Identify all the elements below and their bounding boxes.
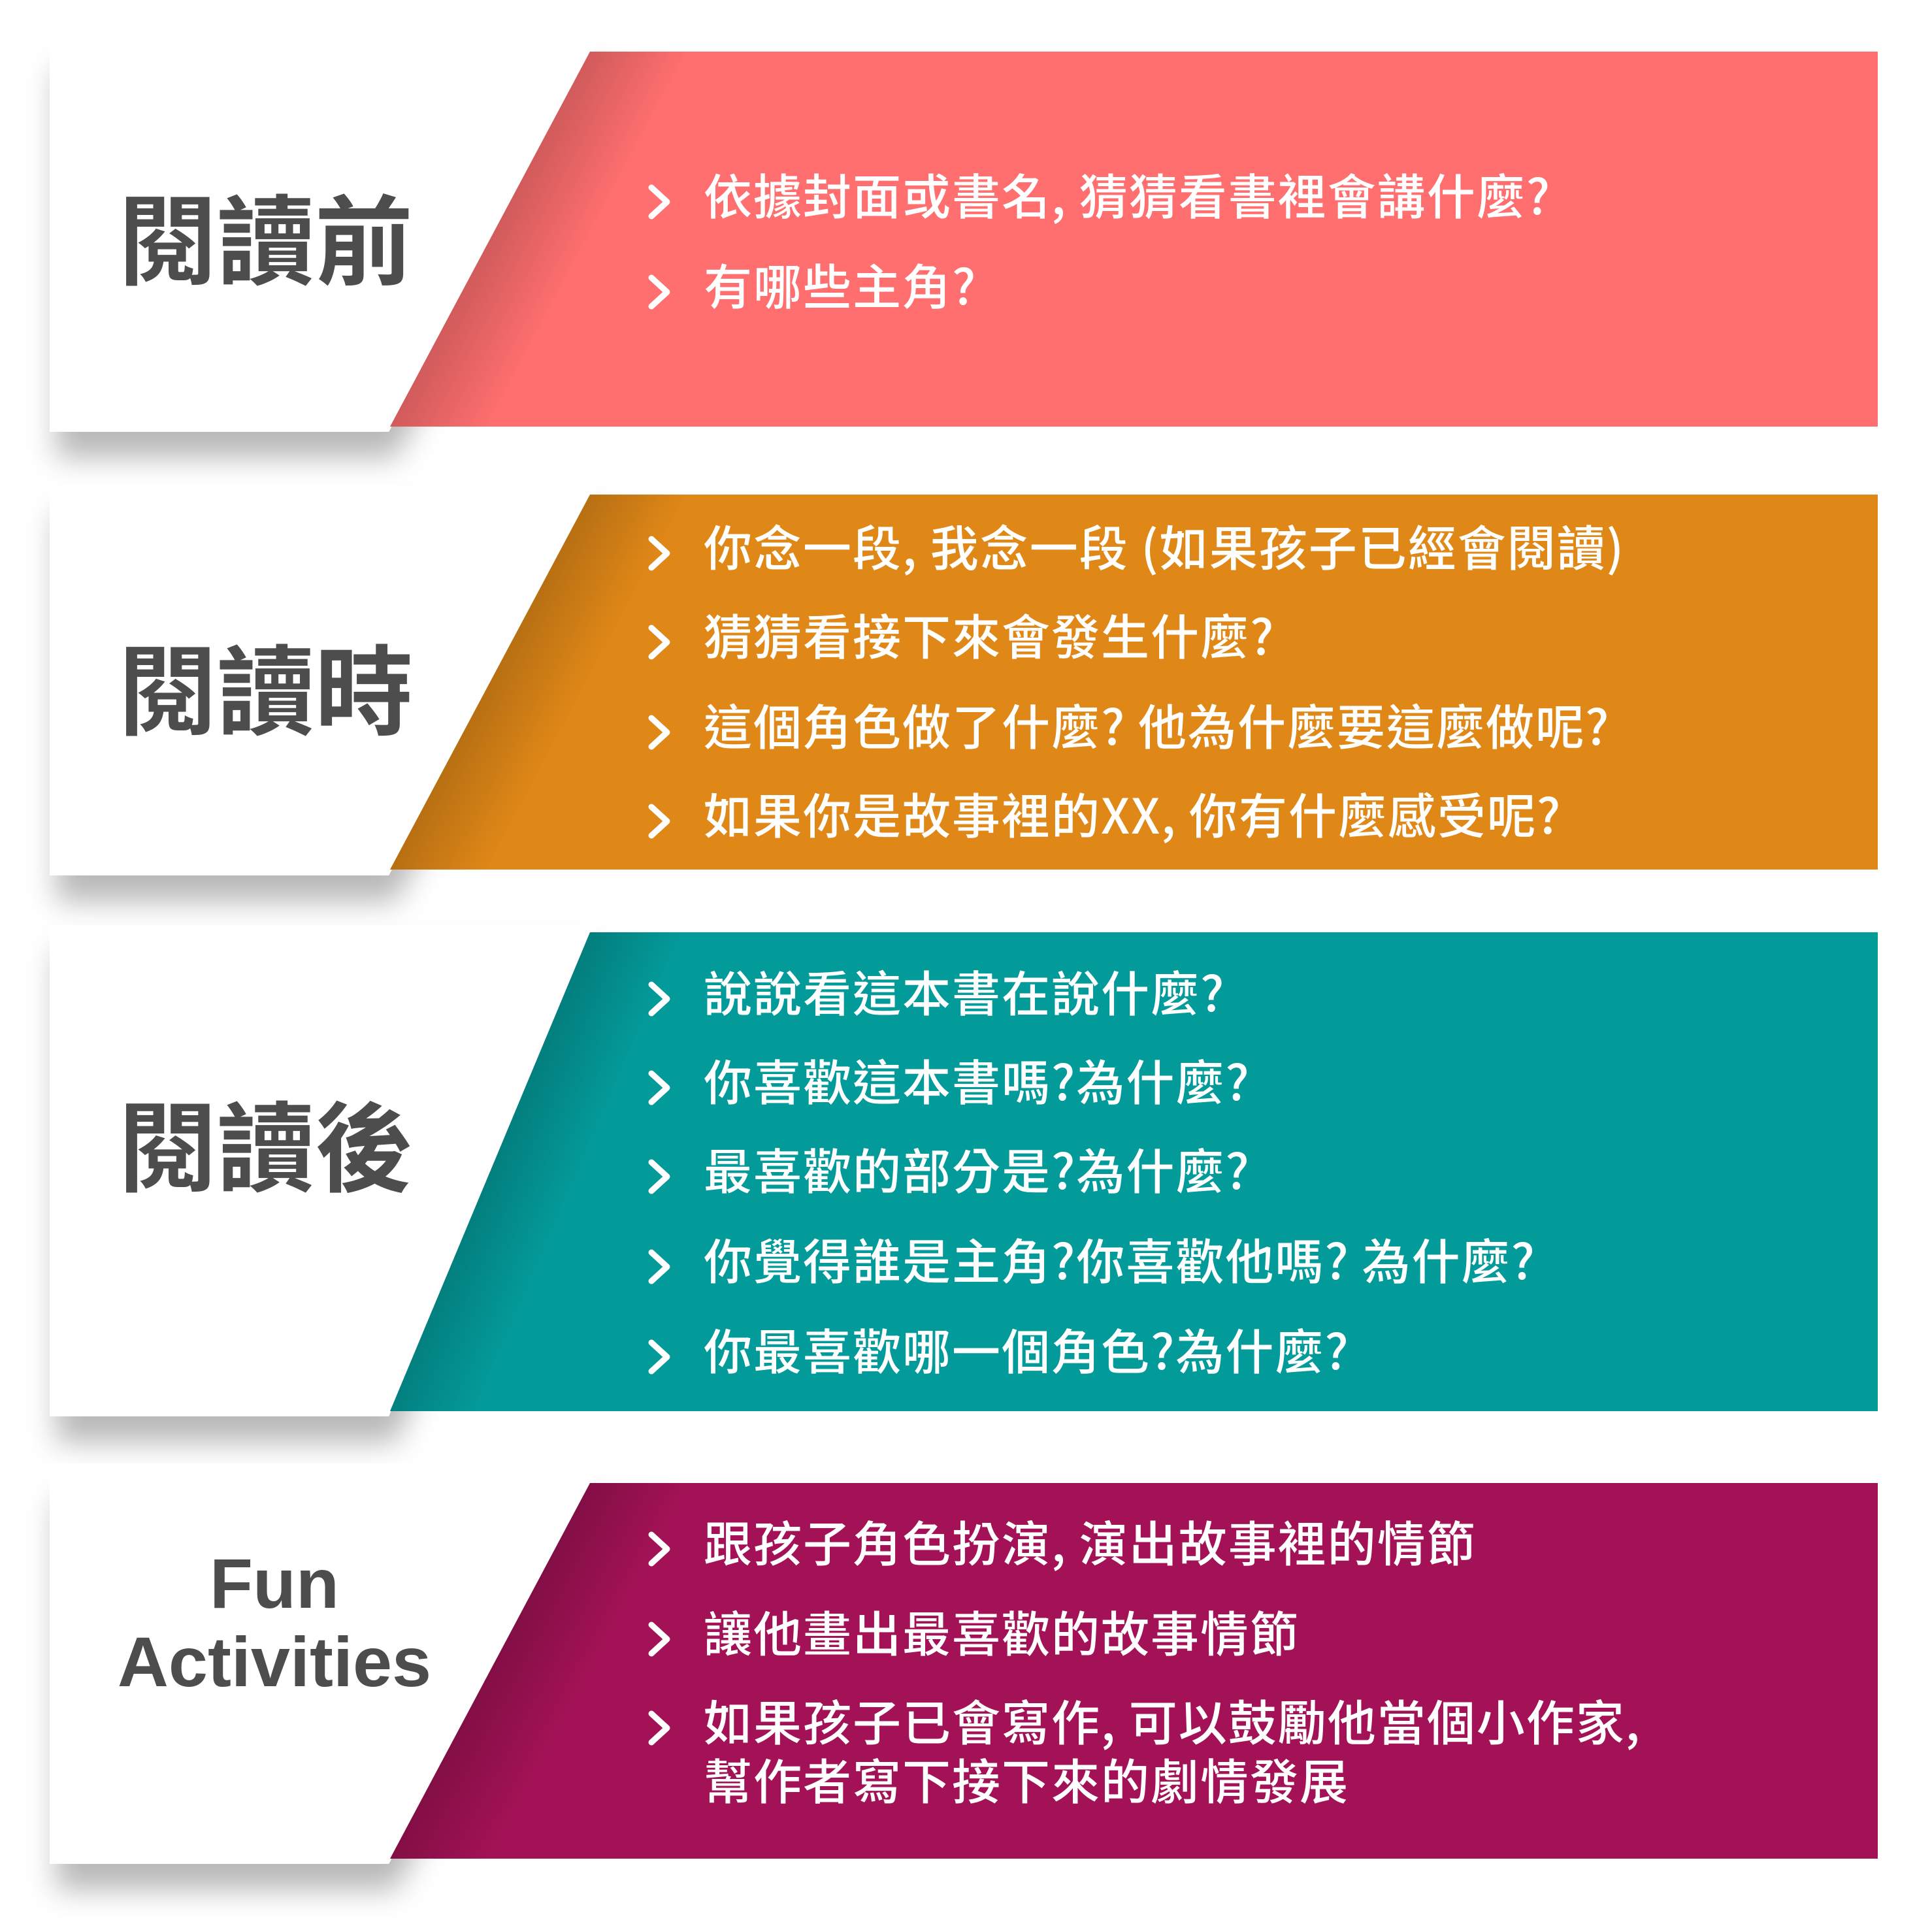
- panel: before reading: [40, 52, 1878, 474]
- bullet list: before reading: 有哪些主角?: [704, 249, 977, 319]
- bullet 1: [648, 510, 1625, 580]
- bullet list: fun activities: 如果孩子已會寫作, 可以鼓勵他當個小作家,: [704, 1685, 1641, 1755]
- bullet list: fun activities: [648, 1506, 1641, 1814]
- panel: during reading: [40, 495, 1878, 918]
- panel: after reading: [40, 932, 1878, 1459]
- heading: Fun Activities: Fun: [210, 1544, 339, 1623]
- bullet list: after reading: 最喜歡的部分是?為什麼?: [704, 1133, 1251, 1203]
- bullet 3: [648, 1685, 1641, 1814]
- bullet list: fun activities: 讓他畫出最喜歡的故事情節: [704, 1596, 1300, 1666]
- bullet list: fun activities: 幫作者寫下接下來的劇情發展: [704, 1744, 1349, 1814]
- bullet list: fun activities: 跟孩子角色扮演, 演出故事裡的情節: [704, 1506, 1477, 1576]
- bullet list: after reading: [648, 956, 1536, 1384]
- bullet 2: [648, 599, 1275, 669]
- bullet list: during reading: 你念一段, 我念一段 (如果孩子已經會閱讀): [704, 510, 1625, 580]
- bullet 1: [648, 956, 1225, 1026]
- bullet 3: [648, 1133, 1251, 1203]
- bullet 1: [648, 1506, 1477, 1576]
- bullet list: before reading: [648, 159, 1551, 319]
- heading: 閱讀時: 閱讀時: [119, 638, 413, 748]
- bullet list: during reading: 猜猜看接下來會發生什麼?: [704, 599, 1275, 669]
- bullet 1: [648, 159, 1551, 229]
- heading: Fun Activities: [118, 1544, 431, 1701]
- heading: Fun Activities: Activities: [118, 1622, 431, 1701]
- bullet 2: [648, 249, 977, 319]
- bullet 2: [648, 1596, 1300, 1666]
- bullet list: during reading: [648, 510, 1625, 848]
- heading: 閱讀後: 閱讀後: [119, 1095, 413, 1205]
- bullet list: during reading: 如果你是故事裡的XX, 你有什麼感受呢?: [704, 778, 1562, 848]
- panel: fun activities: [40, 1483, 1878, 1906]
- bullet 4: [648, 778, 1562, 848]
- bullet list: after reading: 你最喜歡哪一個角色?為什麼?: [704, 1314, 1350, 1384]
- bullet 2: [648, 1045, 1251, 1115]
- bullet 4: [648, 1224, 1536, 1294]
- bullet 3: [648, 689, 1610, 759]
- bullet list: after reading: 說說看這本書在說什麼?: [704, 956, 1225, 1026]
- bullet list: before reading: 依據封面或書名, 猜猜看書裡會講什麼?: [704, 159, 1551, 229]
- bullet list: after reading: 你覺得誰是主角?你喜歡他嗎? 為什麼?: [704, 1224, 1536, 1294]
- heading: 閱讀前: 閱讀前: [119, 188, 413, 298]
- bullet 5: [648, 1314, 1350, 1384]
- bullet list: after reading: 你喜歡這本書嗎?為什麼?: [704, 1045, 1251, 1115]
- bullet list: during reading: 這個角色做了什麼? 他為什麼要這麼做呢?: [704, 689, 1610, 759]
